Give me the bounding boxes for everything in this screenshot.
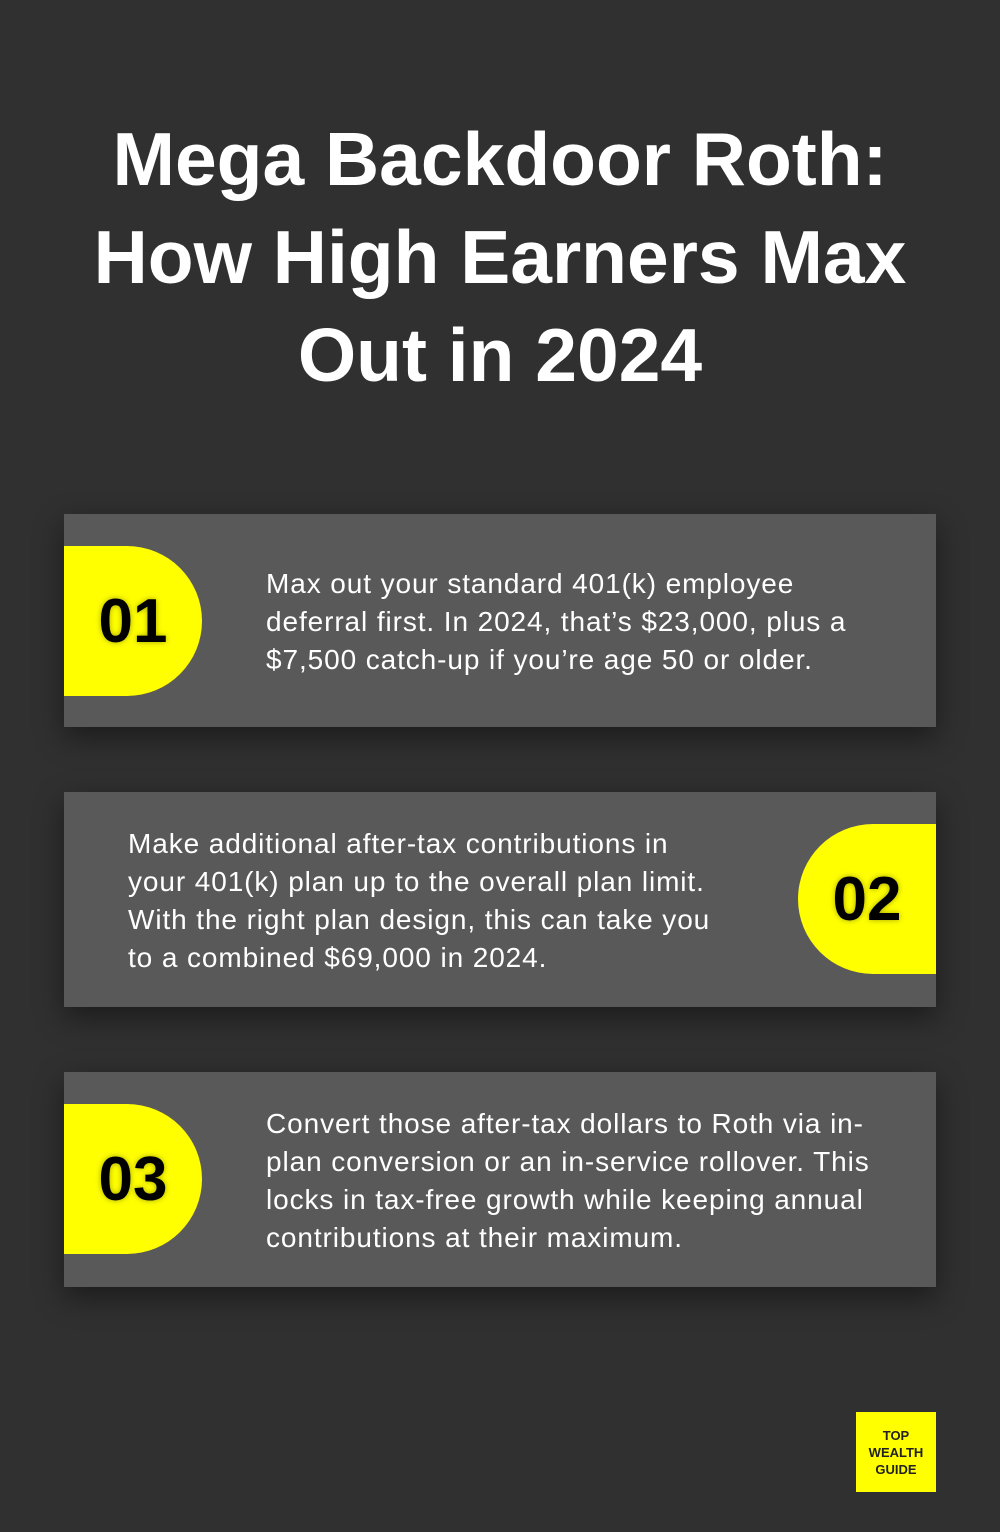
text step 03: plan conversion or an in-service rollover. This — [266, 1146, 870, 1177]
logo: WEALTH — [869, 1444, 923, 1460]
logo: TOP — [883, 1428, 909, 1442]
title: Out in 2024 — [298, 313, 702, 397]
text step 03 — [266, 1108, 870, 1253]
panel: step 02 — [64, 792, 936, 1007]
text step 03: contributions at their maximum. — [266, 1222, 683, 1253]
text step 02: With the right plan design, this can take you — [128, 904, 710, 935]
badge 01: 01 — [99, 586, 167, 656]
badge 03 — [64, 1104, 202, 1254]
text step 01: deferral first. In 2024, that’s $23,000, plus a — [266, 606, 846, 637]
text step 02: Make additional after-tax contributions in — [128, 828, 669, 859]
title — [94, 117, 906, 397]
text step 01: Max out your standard 401(k) employee — [266, 568, 794, 599]
panel: step 03 — [64, 1072, 936, 1287]
logo: GUIDE — [875, 1462, 917, 1476]
badge 03: 03 — [99, 1144, 167, 1214]
text step 01 — [266, 568, 846, 675]
panel: step 01 — [64, 514, 936, 727]
text step 02: to a combined $69,000 in 2024. — [128, 942, 547, 973]
badge 02: 02 — [833, 864, 901, 934]
badge 01 — [64, 546, 202, 696]
badge 02 — [798, 824, 936, 974]
text step 01: $7,500 catch-up if you’re age 50 or older. — [266, 644, 813, 675]
title: Mega Backdoor Roth: — [112, 117, 888, 201]
text step 02: your 401(k) plan up to the overall plan limit. — [128, 866, 705, 897]
text step 03: Convert those after-tax dollars to Roth via in- — [266, 1108, 864, 1139]
logo — [856, 1412, 936, 1492]
text step 02 — [128, 828, 710, 973]
title: How High Earners Max — [94, 215, 906, 299]
text step 03: locks in tax-free growth while keeping annual — [266, 1184, 864, 1215]
